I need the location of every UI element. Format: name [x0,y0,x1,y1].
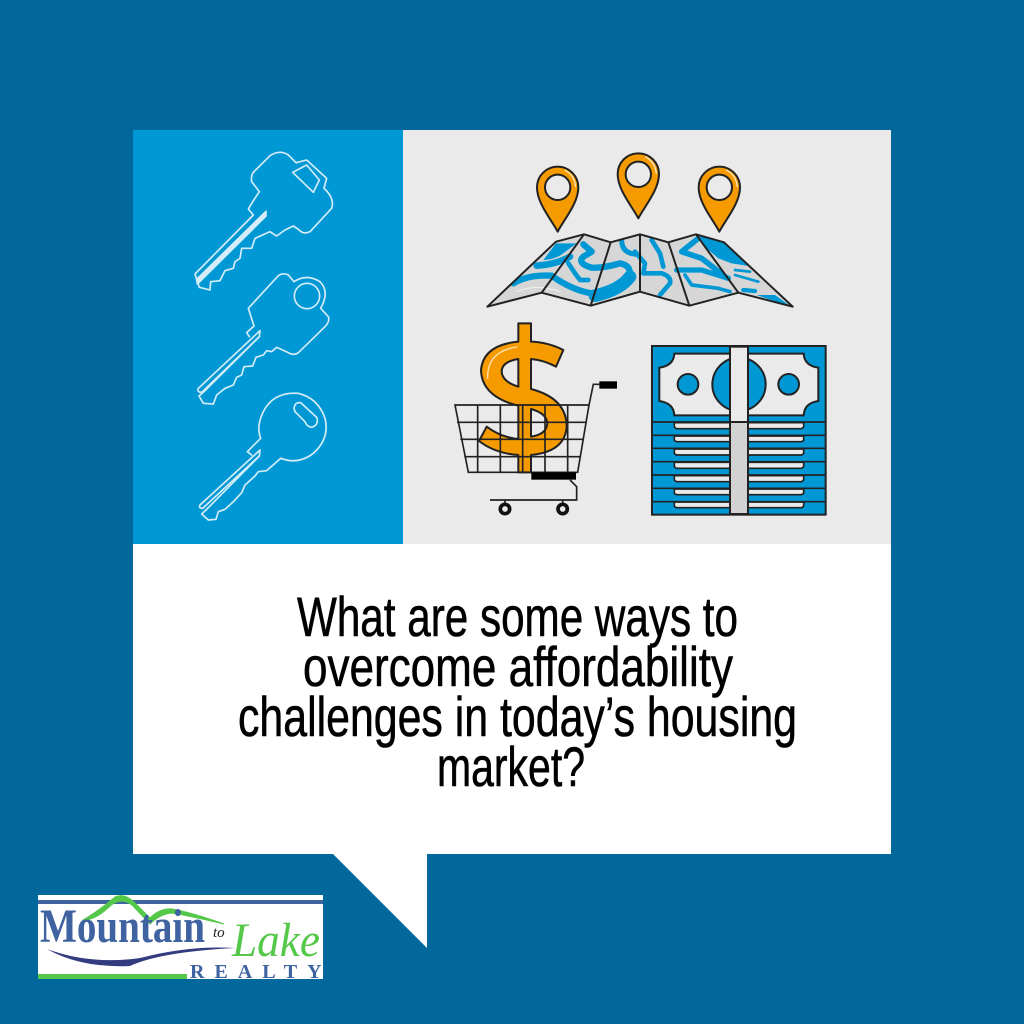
banknote left circle [678,374,698,395]
logo word to: to [213,925,225,941]
banknote right circle [778,374,799,395]
banknote centre circle [712,358,766,411]
dollar highlight [488,347,517,378]
title: challenges in today’s housing [238,685,797,748]
pin hole centre [626,162,651,187]
pin centre [618,153,659,218]
logo wave [47,947,235,966]
logo wordmark Mountain: Mountain [40,900,205,953]
paper band [730,347,748,422]
logo word Lake: Lake [231,914,320,967]
logo green rule [38,974,187,979]
folded map [487,234,793,308]
logo mountains [83,896,224,924]
cart handle [599,381,617,389]
pin highlights [565,157,737,187]
cart wheels [500,504,567,514]
title: overcome affordability [303,635,733,698]
cart basket grid [455,384,599,505]
logo top rule [38,900,323,904]
icon: square-head key [195,152,332,290]
speech bubble panel [133,130,891,948]
cart bar [531,472,576,480]
pin right [699,167,740,232]
icon: three keys [195,152,332,520]
stack base [652,346,826,515]
pin hole right [707,175,732,200]
pin hole left [545,175,570,200]
paper band lower [730,422,748,514]
icon: round-head key [200,393,326,520]
panel: keys [133,130,403,544]
title: market? [437,735,585,798]
logo [38,895,332,983]
title [238,585,797,798]
stacked notes [652,422,826,508]
icon: shopping cart with dollar sign [455,323,617,514]
pin left [537,167,578,232]
icon: map with pins [487,153,793,308]
title: What are some ways to [297,585,738,648]
icon: stack of money [652,346,826,515]
panel: illustrations [403,130,891,544]
icon: round-hole key [198,274,329,404]
dollar sign [479,323,567,472]
logo word Realty: REALTY [190,961,332,983]
map rivers [513,235,793,308]
top banknote [659,354,818,415]
